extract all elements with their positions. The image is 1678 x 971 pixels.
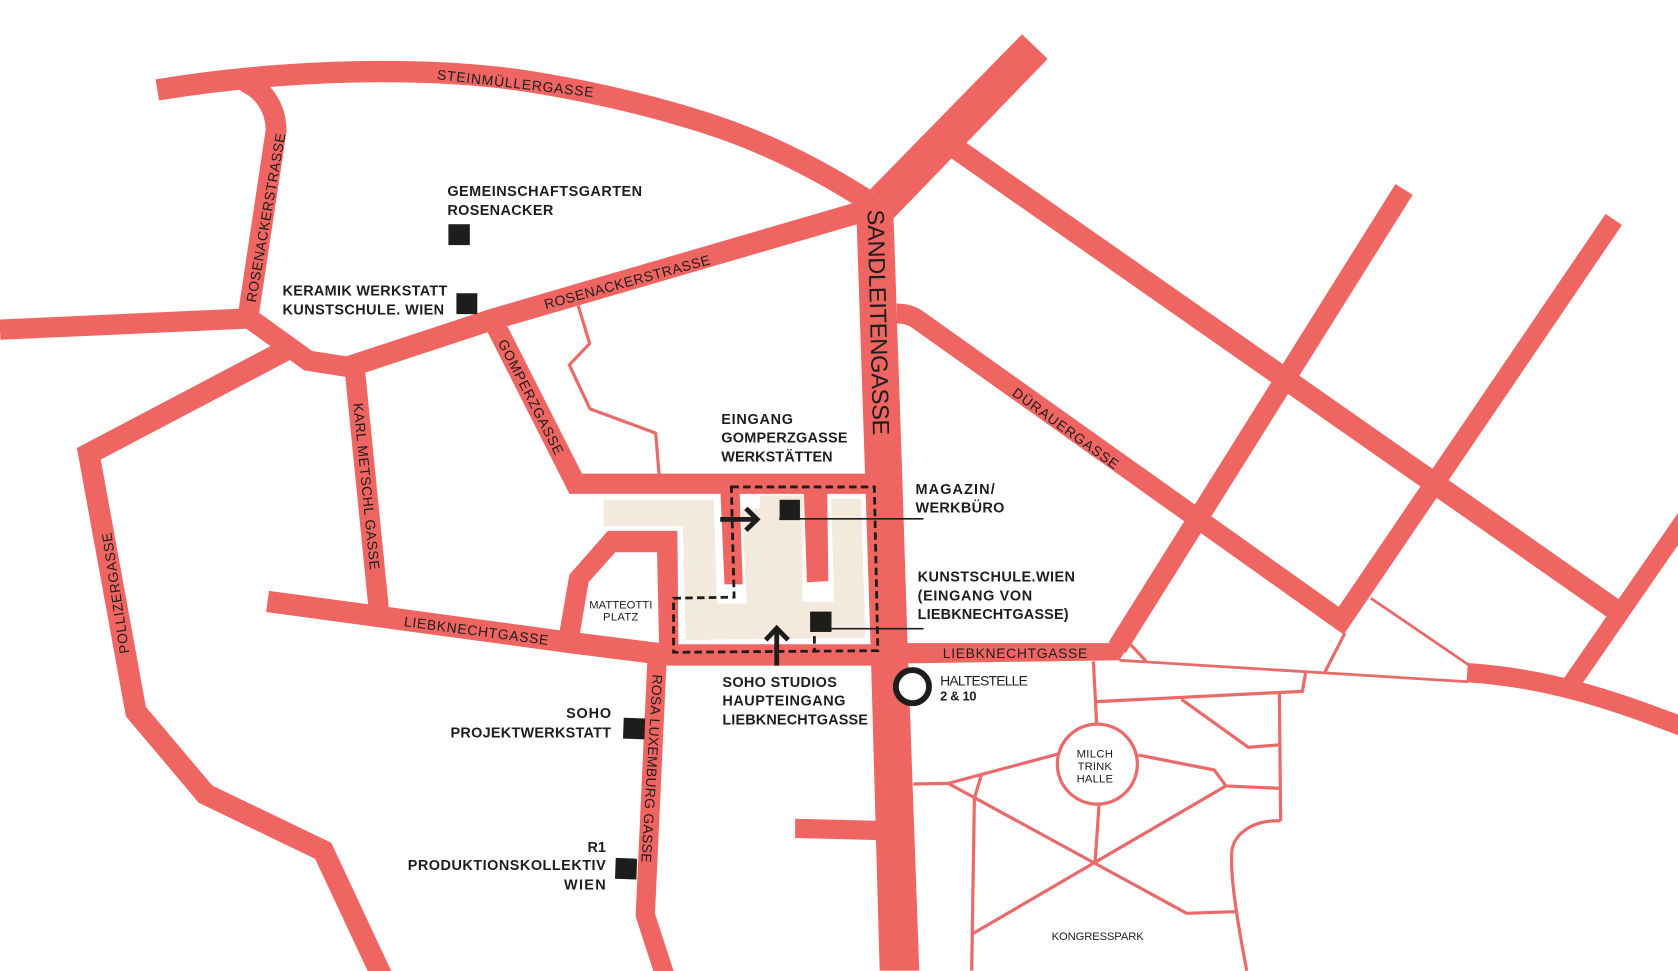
label: Matteotti Platz: PLATZ	[603, 612, 638, 624]
road: short stub	[795, 819, 880, 840]
dashed site boundary	[674, 487, 878, 652]
marker: Keramik Werkstatt	[456, 293, 477, 314]
road: Liebknechtgasse east	[899, 642, 1131, 664]
text: Gemeinschaftsgarten: ROSENACKER	[447, 203, 554, 219]
icon: tram stop ring	[896, 670, 929, 703]
text: Eingang Gomperzgasse: EINGANG	[721, 412, 793, 428]
label: Milch Trink Halle: HALLE	[1077, 773, 1113, 785]
text: Soho Projektwerkstatt: SOHO	[566, 706, 611, 722]
road: Rosenackerstrasse	[345, 209, 872, 368]
label: Rosenackerstrasse west: ROSENACKERSTRASSE	[243, 132, 288, 303]
road: Pollizergasse	[89, 346, 394, 971]
label: Milch Trink Halle	[1077, 748, 1113, 785]
text: Soho Projektwerkstatt	[451, 706, 611, 741]
text: Haltestelle: HALTESTELLE	[940, 672, 1028, 688]
marker: Magazin	[780, 500, 800, 520]
label: Kongresspark: KONGRESSPARK	[1052, 931, 1144, 943]
text: Keramik Werkstatt: KUNSTSCHULE. WIEN	[283, 303, 444, 319]
text: R1 Produktionskollektiv: WIEN	[564, 877, 606, 893]
street names	[98, 65, 1144, 943]
road: courtyard stub east	[804, 487, 828, 582]
text: Kunstschule.Wien: KUNSTSCHULE.WIEN	[918, 570, 1075, 586]
arrow: Liebknechtgasse entrance	[766, 628, 788, 666]
road: Gomperzgasse	[492, 319, 869, 484]
text: Haltestelle: 2 & 10	[940, 688, 977, 703]
leader line: Magazin	[779, 518, 924, 520]
text: R1 Produktionskollektiv	[408, 840, 606, 893]
dashed connector	[813, 636, 816, 651]
label: Matteotti Platz: MATTEOTTI	[589, 599, 652, 611]
text: Eingang Gomperzgasse: WERKSTÄTTEN	[721, 448, 833, 465]
label: Milch Trink Halle: TRINK	[1078, 761, 1112, 773]
label: Pollizergasse: POLLIZERGASSE	[98, 532, 132, 655]
label: Sandleitengasse: SANDLEITENGASSE	[862, 209, 894, 436]
text: Eingang Gomperzgasse: GOMPERZGASSE	[721, 431, 848, 447]
label: Rosenackerstrasse: ROSENACKERSTRASSE	[542, 252, 712, 312]
road: west link	[0, 318, 250, 330]
marker: Kunstschule	[810, 612, 832, 632]
text: Eingang Gomperzgasse	[721, 412, 848, 465]
text: Kunstschule.Wien: LIEBKNECHTGASSE)	[918, 607, 1069, 623]
building complex footprint	[604, 496, 865, 640]
road: Dürauergasse and north-east grid 3	[897, 219, 1614, 621]
text: R1 Produktionskollektiv: R1	[588, 840, 606, 856]
label: Dürauergasse: DÜRAUERGASSE	[1010, 384, 1123, 472]
park and minor paths	[569, 306, 1468, 971]
marker: Gemeinschaftsgarten	[448, 224, 470, 245]
road: Liebknechtgasse west	[268, 601, 878, 655]
text: Gemeinschaftsgarten	[447, 184, 642, 219]
text: Soho Studios: HAUPTEINGANG	[722, 694, 845, 710]
location labels	[283, 184, 1075, 893]
label: Liebknechtgasse east: LIEBKNECHTGASSE	[943, 645, 1087, 661]
leader line: Kunstschule	[832, 628, 924, 630]
text: Keramik Werkstatt: KERAMIK WERKSTATT	[283, 283, 447, 299]
text: Kunstschule.Wien	[918, 570, 1075, 623]
road: north-east grid 2	[1117, 189, 1404, 647]
text: Soho Studios: SOHO STUDIOS	[722, 675, 837, 691]
label: Steinmüllergasse: STEINMÜLLERGASSE	[436, 65, 595, 100]
label: Gomperzgasse: GOMPERZGASSE	[495, 337, 567, 457]
label: Liebknechtgasse west: LIEBKNECHTGASSE	[403, 613, 549, 648]
road: Karl Metschl Gasse	[355, 369, 379, 610]
label: Milch Trink Halle: MILCH	[1077, 748, 1113, 760]
text: Soho Studios	[722, 675, 868, 729]
label: Matteotti Platz	[589, 599, 652, 624]
text: Keramik Werkstatt	[283, 283, 447, 319]
text: R1 Produktionskollektiv: PRODUKTIONSKOLLEKTIV	[408, 858, 606, 874]
road: Matteotti loop	[559, 531, 678, 653]
road: Sandleitengasse	[857, 188, 919, 971]
road: diagonal north-east	[871, 34, 1048, 218]
road: north-east grid 1	[947, 142, 1620, 613]
arrow: Gomperzgasse entrance	[720, 508, 757, 530]
location markers	[448, 224, 832, 880]
text: Soho Studios: LIEBKNECHTGASSE	[722, 713, 868, 729]
road: north-east grid 4	[1569, 479, 1678, 687]
road: courtyard stub west	[720, 487, 743, 584]
text: Soho Projektwerkstatt: PROJEKTWERKSTATT	[451, 725, 611, 741]
text: Magazin	[916, 482, 1004, 517]
marker: R1	[615, 858, 637, 880]
text: Haltestelle	[940, 672, 1028, 703]
road: Steinmüllergasse	[157, 72, 867, 200]
text: Kunstschule.Wien: (EINGANG VON	[918, 589, 1032, 605]
road: Rosenackerstrasse west	[244, 81, 276, 319]
road: west junction	[240, 311, 349, 367]
label: Rosa Luxemburg Gasse: ROSA LUXEMBURG GASSE	[638, 674, 666, 863]
text: Magazin: MAGAZIN/	[916, 482, 995, 498]
text: Gemeinschaftsgarten: GEMEINSCHAFTSGARTEN	[447, 184, 642, 200]
label: Karl Metschl Gasse: KARL METSCHL GASSE	[350, 402, 383, 570]
text: Magazin: WERKBÜRO	[916, 500, 1004, 517]
road: Rosa Luxemburg Gasse	[645, 658, 672, 971]
marker: Soho Projektwerkstatt	[623, 718, 645, 739]
road: east curve	[1467, 673, 1678, 734]
